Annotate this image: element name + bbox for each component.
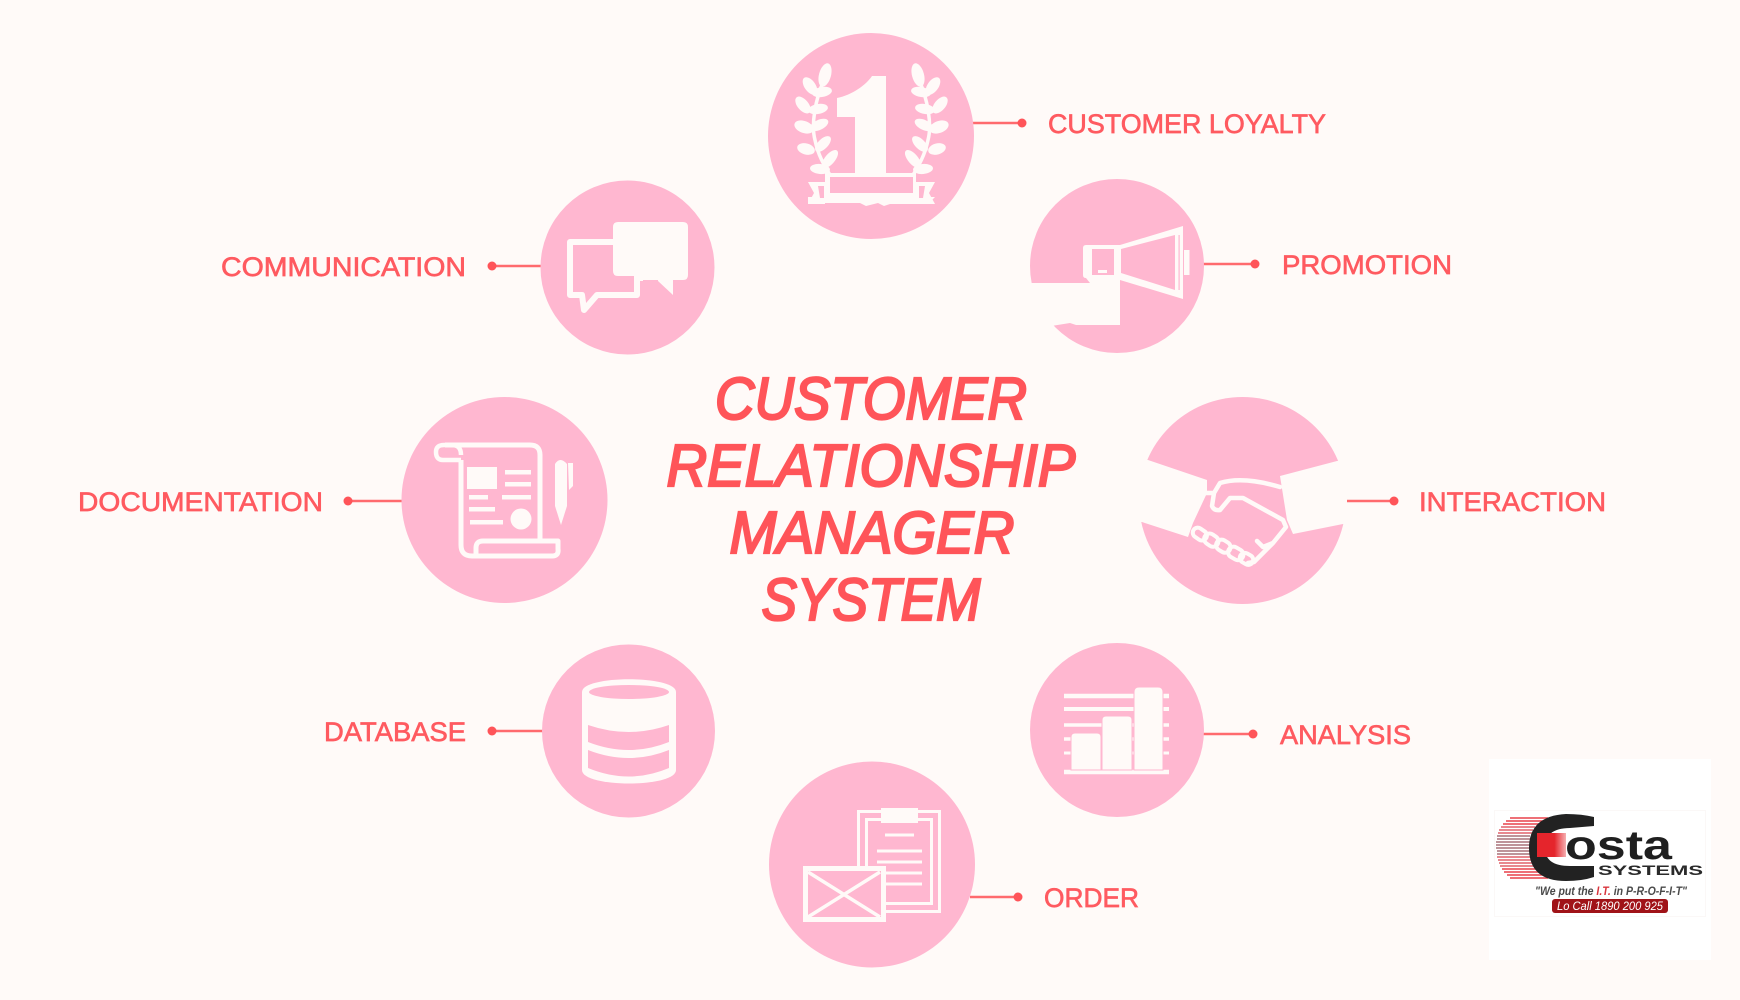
- label: database: DATABASE: [324, 717, 466, 747]
- connector: interaction: [1347, 496, 1398, 506]
- circle: customer loyalty: [768, 33, 974, 239]
- title: RELATIONSHIP: [666, 433, 1076, 499]
- tagline: "We put the I.T. in P-R-O-F-I-T": [1535, 886, 1688, 898]
- panel: order: [769, 762, 1139, 968]
- connector: documentation: [344, 496, 404, 506]
- wordmark: osta: osta: [1565, 822, 1674, 868]
- connector: customer loyalty: [972, 118, 1026, 128]
- icon: speech bubbles: [570, 222, 688, 310]
- circle: analysis: [1030, 643, 1204, 817]
- label: interaction: INTERACTION: [1419, 487, 1606, 517]
- panel: analysis: [1030, 643, 1411, 817]
- connector: analysis: [1202, 730, 1258, 738]
- phone badge: Lo Call 1890 200 925: [1557, 899, 1663, 913]
- panel: customer loyalty: [768, 33, 1326, 239]
- icon: speed lines: [1496, 818, 1548, 878]
- label: customer loyalty: CUSTOMER LOYALTY: [1048, 109, 1326, 139]
- panel: communication: [221, 180, 714, 354]
- title: CUSTOMER: [715, 366, 1027, 432]
- title: [666, 366, 1076, 633]
- label: communication: COMMUNICATION: [221, 252, 466, 282]
- circle: interaction: [1139, 397, 1346, 604]
- connector: communication: [488, 262, 543, 270]
- title: SYSTEM: [762, 567, 981, 633]
- label: promotion: PROMOTION: [1282, 250, 1452, 280]
- circle: database: [542, 644, 715, 818]
- circle: communication: [540, 180, 714, 354]
- icon: megaphone with hand: [1025, 226, 1190, 327]
- icon: handshake: [1130, 458, 1355, 567]
- connector: order: [970, 892, 1022, 902]
- icon: database cylinder: [582, 679, 676, 784]
- panel: promotion: [1025, 179, 1452, 353]
- label: order: ORDER: [1044, 883, 1139, 913]
- title: MANAGER: [730, 500, 1014, 566]
- connector: database: [488, 726, 544, 736]
- label: analysis: ANALYSIS: [1280, 720, 1411, 750]
- icon: clipboard and envelope: [806, 808, 940, 920]
- logo: Costa Systems: [1489, 759, 1711, 960]
- icon: red square: [1537, 833, 1566, 857]
- panel: database: [324, 644, 715, 818]
- wordmark: systems: SYSTEMS: [1598, 862, 1703, 878]
- panel: interaction: [1130, 397, 1606, 604]
- connector: promotion: [1201, 260, 1260, 268]
- icon: bar chart: [1064, 687, 1169, 772]
- icon: number one with laurel: [792, 62, 951, 206]
- circle: documentation: [402, 397, 608, 603]
- icon: large letter C: [1529, 814, 1594, 881]
- icon: document scroll and pen: [436, 445, 573, 556]
- panel: documentation: [78, 397, 608, 603]
- circle: order: [769, 762, 975, 968]
- circle: promotion: [1030, 179, 1204, 353]
- label: documentation: DOCUMENTATION: [78, 487, 323, 517]
